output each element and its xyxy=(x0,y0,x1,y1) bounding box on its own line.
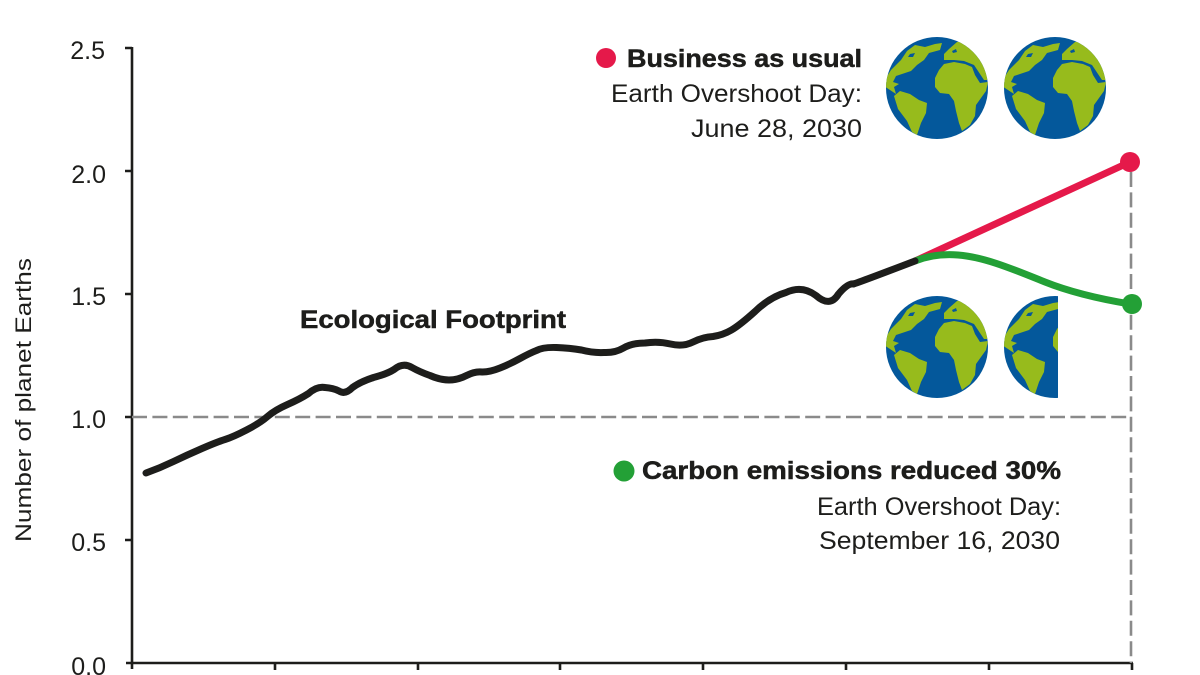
legend: business as usual: June 28, 2030 xyxy=(691,115,862,143)
y axis tick labels: 1.5 xyxy=(71,283,106,311)
legend: business as usual: Earth Overshoot Day: xyxy=(611,80,862,108)
y axis tick labels: 2.0 xyxy=(71,161,106,189)
business as usual line xyxy=(915,152,1140,261)
ecological footprint historical line xyxy=(146,261,915,473)
y axis tick labels: 1.0 xyxy=(71,406,106,434)
chart axes xyxy=(125,47,1133,670)
legend: business as usual: Business as usual xyxy=(627,45,862,73)
y axis tick labels: 2.5 xyxy=(70,37,105,65)
legend: business as usual xyxy=(596,45,862,143)
projection drop line xyxy=(1130,172,1132,663)
y axis tick labels xyxy=(70,37,106,675)
legend: carbon emissions reduced: Earth Overshoot Day: xyxy=(817,493,1061,521)
legend: carbon emissions reduced xyxy=(614,457,1061,555)
reference line: one planet Earth xyxy=(132,416,1130,418)
ecological footprint label: Ecological Footprint xyxy=(300,306,567,334)
legend: carbon emissions reduced: September 16, 2030 xyxy=(819,527,1060,555)
legend: carbon emissions reduced: Carbon emissions reduced 30% xyxy=(642,457,1061,485)
icon: globes, business as usual xyxy=(884,37,1110,139)
icon: globes, carbon emissions reduced xyxy=(886,296,1058,398)
carbon emissions reduced line xyxy=(915,255,1142,314)
y axis tick labels: 0.5 xyxy=(71,529,106,557)
y axis title: Number of planet Earths xyxy=(11,258,36,542)
